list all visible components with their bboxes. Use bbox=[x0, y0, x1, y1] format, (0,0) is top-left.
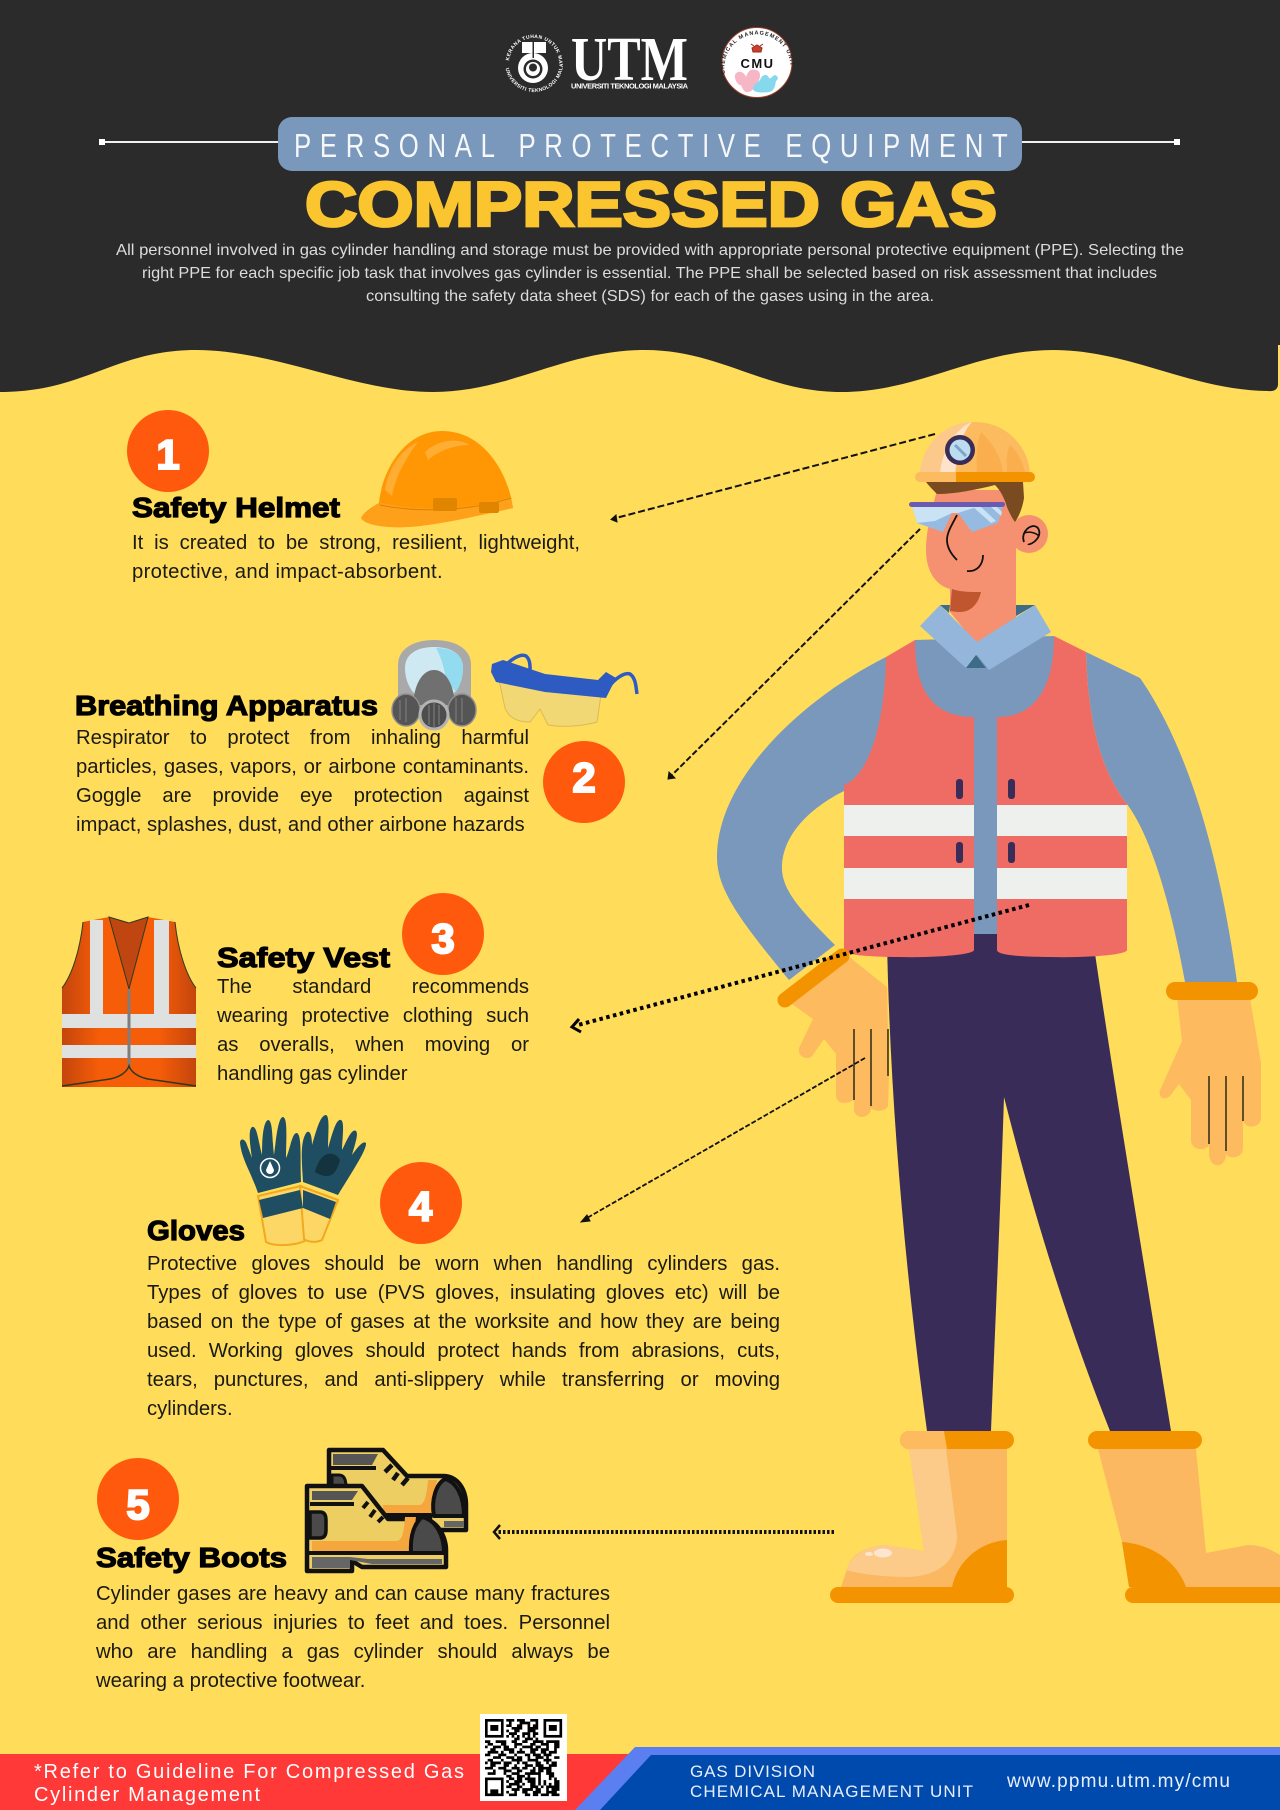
footer: blue band bbox=[575, 1747, 1280, 1810]
body text: gloves bbox=[147, 1250, 780, 1428]
body text: breathing apparatus: Respirator to protect from inhaling harmful bbox=[76, 726, 529, 748]
body text: safety vest: as overalls, when moving or bbox=[217, 1034, 529, 1056]
figure: hard hat bbox=[915, 422, 1035, 482]
illustration: worker in PPE bbox=[717, 422, 1280, 1603]
body text: breathing apparatus: Goggle are provide eye protection against bbox=[76, 784, 529, 806]
logo: CMU bbox=[721, 27, 794, 98]
number badge 2 bbox=[543, 741, 625, 823]
figure: shirt bbox=[915, 636, 1060, 934]
logo: UTM: UTM bbox=[571, 26, 688, 94]
figure: neck and face bbox=[926, 482, 1048, 645]
icon: goggles bbox=[491, 655, 637, 726]
number badge 5 bbox=[97, 1458, 179, 1540]
body text: safety helmet: It is created to be strong, resilient, lightweight, bbox=[132, 532, 580, 554]
icon: reflective vest bbox=[62, 917, 196, 1087]
intro paragraph: All personnel involved in gas cylinder handling and storage must be provided with appropriate personal protective equipment (PPE). Selecting the bbox=[116, 242, 1184, 259]
body text: safety boots: and other serious injuries to feet and toes. Personnel bbox=[96, 1612, 610, 1634]
footer: division name: GAS DIVISION bbox=[690, 1762, 815, 1781]
figure: left boot bbox=[830, 1431, 1014, 1603]
panel: safety vest bbox=[62, 893, 529, 1092]
body text: safety boots: who are handling a gas cylinder should always be bbox=[96, 1640, 610, 1662]
heading: safety helmet: Safety Helmet bbox=[132, 492, 340, 523]
figure: safety goggles bbox=[909, 502, 1005, 532]
header rule with end caps bbox=[99, 139, 1180, 145]
figure: right boot bbox=[1088, 1431, 1280, 1603]
heading: gloves: Gloves bbox=[147, 1215, 245, 1246]
body text: safety vest: handling gas cylinder bbox=[217, 1062, 408, 1084]
body text: breathing apparatus: impact, splashes, dust, and other airbone hazards bbox=[76, 814, 525, 836]
body text: safety vest: The standard recommends bbox=[217, 976, 529, 998]
footer: website: www.ppmu.utm.my/cmu bbox=[1006, 1771, 1230, 1792]
body text: safety vest bbox=[217, 972, 529, 1092]
body text: gloves: cylinders. bbox=[147, 1398, 233, 1420]
number badge 2: 2 bbox=[572, 754, 596, 801]
body text: gloves: tears, punctures, and anti-slippery while transferring or moving bbox=[147, 1368, 780, 1390]
body text: safety boots bbox=[96, 1580, 610, 1700]
body text: safety helmet bbox=[132, 528, 580, 588]
intro paragraph: right PPE for each specific job task that involves gas cylinder is essential. The PPE shall be selected based on risk assessment that includes bbox=[142, 265, 1157, 282]
body text: gloves: Protective gloves should be worn when handling cylinders gas. bbox=[147, 1252, 780, 1274]
icon: work boots bbox=[307, 1450, 466, 1571]
footer: red band bbox=[0, 1754, 640, 1810]
number badge 4: 4 bbox=[409, 1183, 433, 1230]
figure: trousers bbox=[887, 940, 1171, 1431]
body text: safety vest: wearing protective clothing such bbox=[217, 1004, 529, 1026]
panel: breathing apparatus bbox=[75, 640, 637, 844]
footer note: Cylinder Management bbox=[34, 1784, 260, 1806]
logo: CMU: CHEMICAL MANAGEMENT UNIT bbox=[721, 30, 794, 74]
body text: breathing apparatus bbox=[76, 724, 529, 844]
logo: CMU: CMU bbox=[740, 56, 775, 71]
number badge 3 bbox=[402, 893, 484, 975]
footer: division name bbox=[690, 1762, 973, 1801]
intro paragraph bbox=[116, 242, 1184, 305]
body text: gloves: Types of gloves to use (PVS gloves, insulating gloves etc) will be bbox=[147, 1282, 780, 1304]
icon: work gloves bbox=[240, 1115, 366, 1245]
QR code bbox=[480, 1714, 567, 1801]
number badge 5: 5 bbox=[126, 1481, 150, 1528]
footer note: *Refer to Guideline For Compressed Gas bbox=[34, 1761, 464, 1783]
logo: UTM: UNIVERSITI TEKNOLOGI MALAYSIA bbox=[571, 82, 689, 90]
panel: gloves bbox=[147, 1115, 780, 1428]
title: COMPRESSED GAS bbox=[305, 170, 997, 240]
banner: personal protective equipment: PERSONAL PROTECTIVE EQUIPMENT bbox=[294, 128, 1008, 165]
figure: left glove bbox=[785, 956, 889, 1117]
heading: safety boots: Safety Boots bbox=[96, 1542, 287, 1573]
figure: right glove bbox=[1160, 982, 1261, 1165]
heading: breathing apparatus: Breathing Apparatus bbox=[75, 690, 378, 721]
body text: breathing apparatus: particles, gases, vapors, or airbone contaminants. bbox=[76, 756, 529, 778]
panel: safety boots bbox=[96, 1450, 610, 1700]
arrow: helmet bbox=[611, 434, 935, 522]
header wave band bbox=[0, 0, 1280, 392]
body text: gloves: used. Working gloves should protect hands from abrasions, cuts, bbox=[147, 1340, 780, 1362]
icon: hard hat bbox=[361, 431, 513, 527]
number badge 1: 1 bbox=[156, 431, 180, 478]
figure: safety vest bbox=[844, 636, 1127, 960]
panel: safety helmet bbox=[127, 410, 580, 588]
arrow: goggles bbox=[668, 529, 920, 779]
figure: arm and sleeve left bbox=[717, 657, 890, 980]
body text: gloves: based on the type of gases at the worksite and how they are being bbox=[147, 1310, 780, 1332]
body text: safety boots: wearing a protective footwear. bbox=[96, 1670, 365, 1692]
intro paragraph: consulting the safety data sheet (SDS) for each of the gases using in the area. bbox=[366, 288, 934, 305]
figure: shirt collar bbox=[920, 605, 1051, 670]
arrow: gloves bbox=[581, 1058, 865, 1222]
number badge 4 bbox=[380, 1162, 462, 1244]
footer note bbox=[34, 1761, 464, 1806]
heading: safety vest: Safety Vest bbox=[217, 942, 390, 973]
arrow: vest bbox=[572, 905, 1029, 1032]
logo: UTM bbox=[506, 26, 689, 94]
body text: safety helmet: protective, and impact-absorbent. bbox=[132, 560, 443, 582]
figure: arm and sleeve right bbox=[1086, 652, 1237, 982]
footer: division name: CHEMICAL MANAGEMENT UNIT bbox=[690, 1782, 973, 1801]
number badge 1 bbox=[127, 410, 209, 492]
body text: safety boots: Cylinder gases are heavy and can cause many fractures bbox=[96, 1582, 610, 1604]
banner: personal protective equipment bbox=[278, 117, 1022, 171]
arrow: boots bbox=[494, 1525, 834, 1539]
number badge 3: 3 bbox=[431, 915, 455, 962]
icon: respirator mask bbox=[392, 640, 476, 729]
